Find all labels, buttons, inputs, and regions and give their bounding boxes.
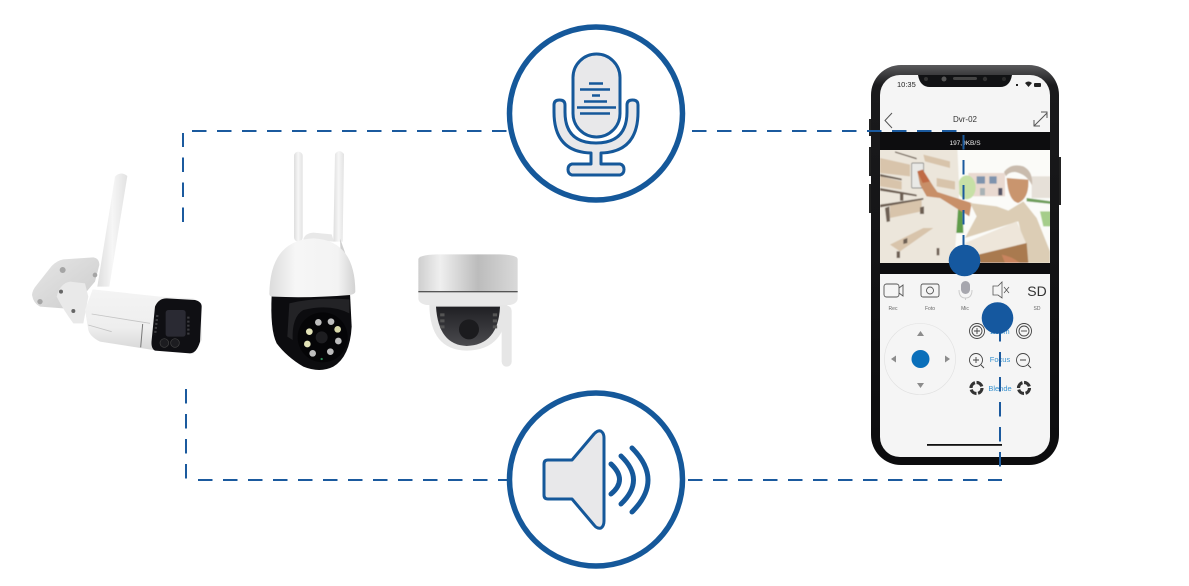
black data rate bar xyxy=(880,132,1050,150)
connector endpoint: microphone xyxy=(949,245,980,276)
camera: pan-tilt dome camera xyxy=(269,151,355,370)
iris controls xyxy=(971,382,1030,394)
sound waves xyxy=(611,448,648,512)
black lower body xyxy=(271,293,352,370)
dashed connector: camera to speaker xyxy=(186,389,507,480)
dashed connector: speaker to phone xyxy=(688,327,1002,480)
status bar time: 10:35 xyxy=(897,80,916,89)
white dome xyxy=(269,238,355,297)
SD label and caption xyxy=(1027,283,1047,312)
smartphone xyxy=(869,65,1061,465)
phone body xyxy=(871,65,1059,465)
capsule lines xyxy=(577,84,616,114)
dashed connector: camera to microphone xyxy=(183,131,507,222)
data rate text: 197,9KB/S xyxy=(949,140,981,147)
mute speaker icon xyxy=(993,282,1009,298)
dark inner dome xyxy=(436,307,500,346)
courier face xyxy=(1007,178,1028,203)
icon: microphone in circle xyxy=(510,27,682,200)
microphone cradle xyxy=(554,100,638,175)
focus controls xyxy=(970,354,1031,368)
video feed: delivery man at door xyxy=(877,148,1053,268)
zoom label: Zoom xyxy=(990,327,1010,336)
iris label: Blende xyxy=(988,384,1012,393)
connector endpoint: speaker xyxy=(982,302,1013,334)
courier hand and arm xyxy=(917,170,972,216)
doorbell panel xyxy=(912,163,924,188)
microphone capsule xyxy=(573,54,620,137)
fullscreen icon xyxy=(1034,112,1047,126)
antenna xyxy=(97,173,127,287)
wall stone tones xyxy=(880,155,955,251)
antenna xyxy=(502,306,512,367)
icon: speaker in circle xyxy=(510,393,682,566)
camera: bullet camera with antenna xyxy=(32,173,202,353)
notch with sensors xyxy=(918,75,1012,87)
status icons xyxy=(1016,82,1041,87)
direction pad xyxy=(884,324,956,394)
courier polo shirt xyxy=(965,201,1050,263)
screen title: Dvr-02 xyxy=(953,115,978,124)
mount arm xyxy=(57,282,88,323)
microphone icon and label xyxy=(959,281,972,312)
SD label and caption: SD xyxy=(1034,306,1041,312)
SD label and caption: SD xyxy=(1027,283,1047,299)
record icon and label: Rec xyxy=(889,306,898,312)
parcel box xyxy=(965,221,1027,255)
clear dome xyxy=(429,305,507,351)
speaker cone xyxy=(544,431,604,528)
wall mount plate xyxy=(32,257,99,308)
focus label: Focus xyxy=(990,355,1010,364)
phone side buttons xyxy=(869,119,1061,213)
lens face with LEDs xyxy=(298,312,348,362)
microphone icon and label: Mic xyxy=(961,306,969,312)
photo icon and label: Foto xyxy=(925,306,935,312)
twin antennas xyxy=(294,152,303,242)
stone wall xyxy=(877,148,959,265)
phone screen xyxy=(880,75,1050,457)
photo icon and label xyxy=(921,284,939,312)
upper cylinder housing xyxy=(418,254,518,292)
distant house and lawn xyxy=(968,173,1005,196)
record icon and label xyxy=(884,284,903,312)
back arrow xyxy=(885,113,892,128)
zoom controls xyxy=(970,324,1032,338)
camera: fixed dome camera xyxy=(418,254,518,367)
base ring xyxy=(418,292,518,305)
black bar under video xyxy=(880,262,1050,274)
courier cap xyxy=(1004,165,1032,185)
dashed connector: microphone to phone xyxy=(692,131,964,250)
home indicator xyxy=(927,444,1002,446)
camera body xyxy=(85,289,202,353)
black front panel xyxy=(151,298,202,353)
